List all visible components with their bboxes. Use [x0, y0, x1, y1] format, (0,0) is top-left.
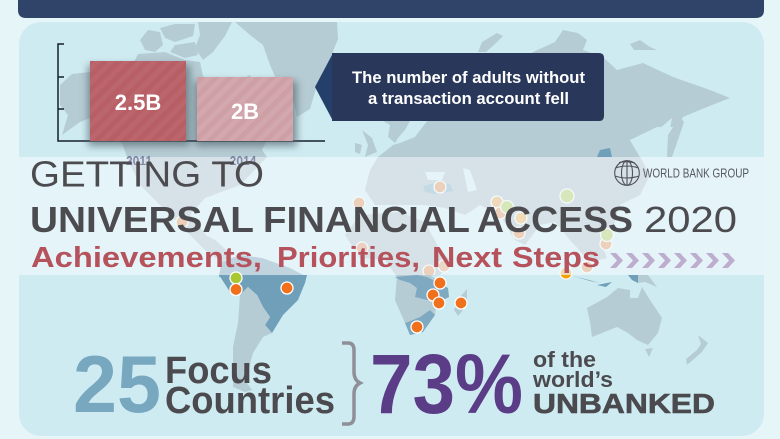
map: South Africa [405, 310, 435, 335]
title: Universal Financial Access 2020: UNIVERSAL [30, 199, 254, 240]
chevron arrows [610, 253, 735, 268]
chart axes [58, 44, 325, 141]
map: Australia [587, 287, 662, 345]
title: Getting to: GETTING TO [30, 154, 264, 194]
subtitle: Priorities, [277, 242, 420, 274]
Turkey highlight [423, 183, 453, 194]
map: Southern Africa [395, 276, 447, 323]
faded focus markers in band [176, 181, 614, 279]
map: Novaya Zemlya [478, 33, 503, 52]
map: Ireland [355, 143, 362, 154]
World Bank Group logo [615, 161, 749, 185]
bar: 2014 [197, 77, 293, 141]
map: Great Britain [362, 130, 377, 157]
bar chart [58, 44, 325, 168]
map: Alaska [60, 72, 90, 135]
subtitle: Steps [512, 242, 600, 274]
map: New Zealand [686, 335, 708, 365]
map: Brazil and neighbours [219, 275, 307, 333]
subtitle: Achievements, [31, 242, 262, 274]
subtitle [31, 242, 600, 274]
map: Greenland [235, 22, 338, 117]
bar value 2B: 2B [231, 99, 259, 124]
map: Black sea [425, 172, 445, 180]
callout arrow tip [315, 53, 340, 121]
map: East Africa focus countries [395, 275, 449, 300]
logo text: WORLD BANK GROUP [643, 166, 749, 180]
title: Universal Financial Access 2020: FINANCIAL [263, 199, 470, 240]
title band [19, 157, 764, 275]
year label 2014: 2014 [230, 154, 257, 168]
map: Kamchatka [667, 116, 684, 157]
marker under band edge [560, 267, 572, 279]
world map [60, 22, 730, 392]
map: Arctic islands [140, 22, 232, 60]
brace [342, 343, 360, 424]
label of the: of the [533, 347, 596, 372]
number 25: 25 [73, 340, 161, 430]
map: Southern cone [233, 287, 272, 392]
stat: 73% of the world's unbanked [370, 337, 715, 431]
map: Svalbard islands [630, 40, 657, 50]
callout text line 2: a transaction account fell [368, 90, 569, 108]
map: sea of Okhotsk [662, 118, 672, 127]
map: Tasmania [645, 348, 653, 357]
stat: 25 focus countries [73, 340, 335, 430]
icon: globe [615, 161, 639, 185]
map: Indonesia [573, 276, 612, 287]
bar shadows [88, 65, 297, 146]
map: Papua [638, 275, 657, 287]
label Focus: Focus [165, 350, 272, 392]
bar: 2011 [90, 61, 186, 141]
label UNBANKED: UNBANKED [533, 388, 715, 419]
map: North Africa [345, 212, 452, 277]
bar value 2.5B: 2.5B [115, 90, 161, 115]
subtitle: Next [432, 242, 502, 274]
map: Madagascar [454, 289, 467, 316]
map: South America north [219, 255, 307, 277]
focus country markers [230, 272, 467, 333]
callout [315, 53, 604, 121]
map: Papua focus [628, 275, 638, 283]
map: China focus highlight [597, 148, 612, 157]
year label 2011: 2011 [126, 154, 152, 168]
map: Canada mainland [121, 52, 267, 262]
title: Universal Financial Access 2020: ACCESS [477, 199, 633, 240]
title: Universal Financial Access 2020 [30, 199, 737, 240]
title: Universal Financial Access 2020: 2020 [644, 199, 737, 240]
label Countries: Countries [165, 380, 335, 422]
callout body [332, 53, 604, 121]
label world's: world’s [532, 367, 613, 392]
map: Caspian sea [463, 168, 477, 192]
map: Scandinavia [383, 121, 410, 143]
callout text line 1: The number of adults without [352, 69, 586, 87]
top banner bar [18, 0, 764, 18]
number 73%: 73% [370, 337, 523, 431]
map: Eurasia [365, 30, 730, 262]
